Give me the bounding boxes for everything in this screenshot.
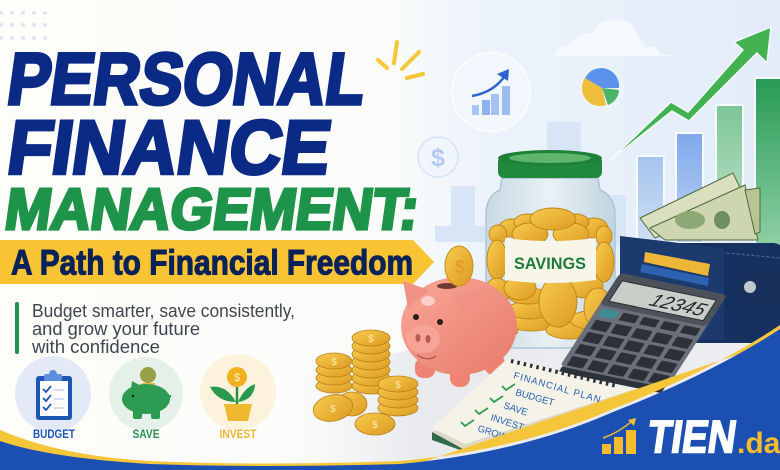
tagline — [15, 301, 295, 357]
subtitle ribbon: A Path to Financial Freedom — [11, 244, 413, 282]
piggy body — [401, 277, 517, 375]
title: management: MANAGEMENT: — [1, 177, 423, 242]
icon: invest: $ — [234, 372, 240, 384]
arrow: green growth — [608, 27, 771, 162]
label: save: SAVE — [132, 429, 160, 441]
icon: yellow sparks — [378, 42, 423, 78]
coins in jar — [485, 208, 614, 339]
floor surface — [300, 325, 780, 470]
notebook: GROW — [476, 423, 509, 443]
notebook: BUDGET — [514, 387, 555, 409]
calculator readout: 12345 — [645, 291, 712, 320]
piggy ears — [403, 281, 429, 308]
icon: growth chart badge — [452, 53, 530, 131]
coin stacks: $ — [331, 357, 337, 368]
plan checks — [461, 384, 515, 426]
title: personal: PERSONAL — [3, 38, 371, 120]
yellow swoosh edge — [0, 325, 780, 470]
icon: dollar badge: $ — [431, 144, 445, 172]
logo arrow — [603, 420, 633, 438]
icon: invest — [200, 354, 276, 441]
piggy bank — [401, 246, 517, 387]
tagline: Budget smarter, save consistently, — [32, 301, 295, 321]
jar body — [486, 178, 615, 348]
notebook — [432, 358, 634, 451]
tagline: and grow your future — [32, 319, 200, 339]
jar lid — [498, 156, 602, 178]
icon: dollar badge — [418, 137, 458, 177]
plan text: FINANCIAL PLAN — [512, 370, 602, 406]
logo: tien.da — [602, 411, 780, 462]
wallet — [620, 236, 780, 343]
spiral binding — [511, 361, 617, 386]
piggy bank: $ — [455, 257, 465, 277]
coin stacks: $ — [372, 420, 378, 431]
piggy legs — [415, 355, 505, 387]
calculator screen — [609, 281, 716, 321]
logo bars — [602, 430, 636, 454]
icon: pie chart — [580, 66, 624, 110]
icon: save — [109, 357, 183, 441]
coin stacks: $ — [395, 380, 401, 391]
icon: budget — [15, 356, 91, 441]
coin in slot — [445, 246, 473, 286]
piggy snout — [406, 325, 440, 353]
savings jar — [485, 150, 615, 348]
coin stacks: $ — [368, 334, 374, 345]
coin stacks — [311, 330, 418, 435]
bar chart — [637, 78, 780, 248]
coin stacks: $ — [330, 404, 336, 415]
calculator keys — [567, 309, 701, 385]
notebook: INVEST — [489, 412, 525, 434]
wallet clasp — [738, 272, 780, 304]
tagline: with confidence — [31, 337, 160, 357]
logo suffix: .da — [737, 427, 780, 460]
icon: cloud — [553, 19, 677, 56]
logo text: TIEN — [645, 411, 740, 462]
savings text: SAVINGS — [514, 254, 586, 273]
wallet cards — [644, 252, 710, 276]
skyline — [435, 122, 626, 245]
jar label — [505, 238, 596, 283]
notebook: SAVE — [502, 400, 529, 418]
blue swoosh — [0, 329, 780, 470]
title: finance: FINANCE — [3, 106, 337, 190]
cash — [640, 173, 760, 240]
decorative dot grid — [0, 11, 47, 40]
calculator — [556, 273, 727, 394]
label: budget: BUDGET — [33, 429, 75, 441]
label: invest: INVEST — [220, 429, 256, 441]
